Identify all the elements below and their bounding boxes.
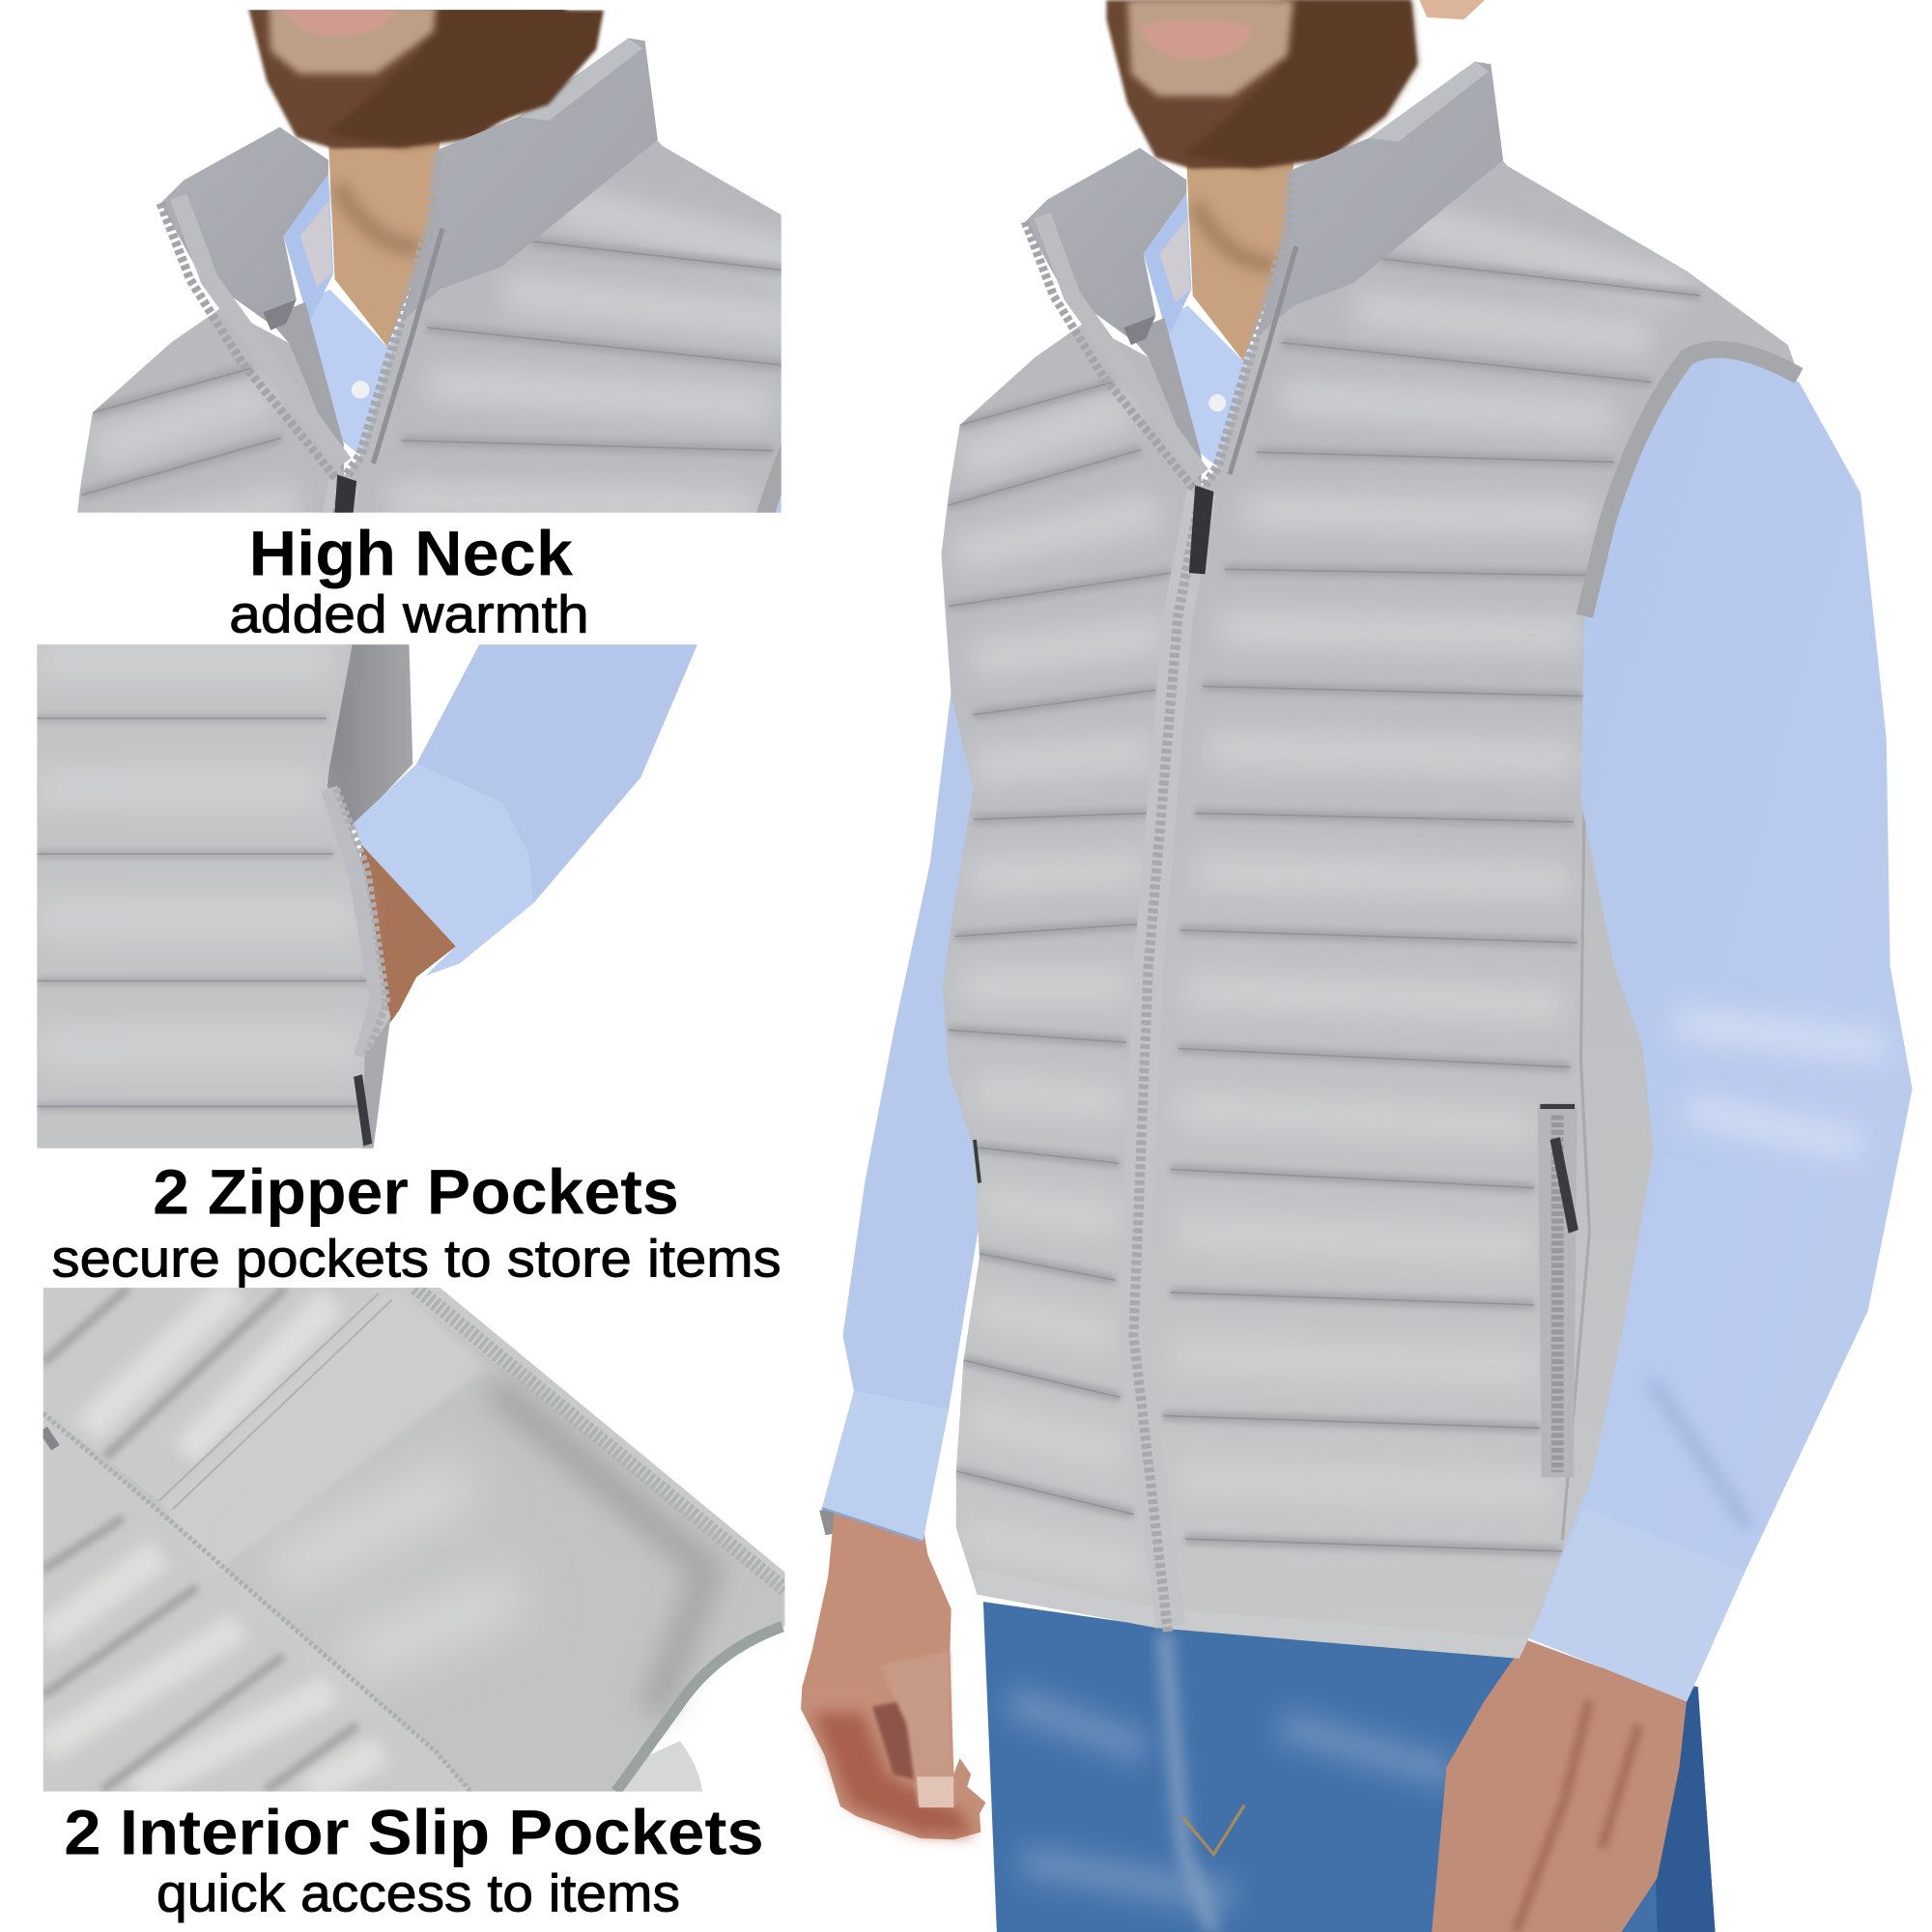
ear [1419,0,1485,19]
quilting seams, soft [949,259,1700,1551]
arm opening binding [616,1627,782,1792]
heading: 2 Zipper Pockets: 2 Zipper Pockets [153,1156,679,1228]
left wristwatch [819,1507,838,1535]
zipper edge [415,1288,784,1589]
heading: 2 Interior Slip Pockets: 2 Interior Slip Pockets [64,1798,764,1869]
puff highlights [955,222,1688,1571]
shirt sleeve [416,644,697,903]
main figure: man wearing grey puffer vest [801,0,1913,1932]
hem trim [974,1583,1528,1654]
right collar [1256,62,1503,337]
jeans [983,1602,1716,1932]
text: quick access to items: quick access to items [156,1862,680,1922]
vest body [941,135,1799,1659]
panel: interior slip pockets detail photo [43,1287,784,1792]
text: secure pockets to store items: secure pockets to store items [52,1228,781,1288]
shirt collar and chest [1144,193,1256,467]
right sleeve [1526,349,1913,1701]
hand in pocket [361,844,456,1057]
text: added warmth: added warmth [229,583,589,643]
extra beard at panel crop [493,10,604,124]
neck [1186,160,1293,361]
armhole trim [1584,350,1799,616]
heading: High Neck: High Neck [249,519,573,590]
side pocket zipper [1538,1106,1578,1477]
beard and mouth [1106,0,1417,169]
pocket zipper [329,788,387,1057]
inner left collar [1025,148,1202,487]
left pocket slit [975,1140,980,1182]
quilting seams, sharp [949,259,1700,1551]
shirt cuff [353,764,533,976]
left sleeve [822,690,998,1542]
right hand [1432,1640,1687,1932]
left hand [801,1513,985,1839]
centre zipper [1025,174,1296,1634]
vest side panel [327,644,412,828]
quilted lining base [43,1288,784,1792]
pocket lower edge and pull [354,1016,390,1149]
main zipper pull [1189,486,1213,574]
vest front [37,644,390,1149]
panel: zipper pockets detail photo [37,644,697,1149]
panel: high neck detail photo [77,10,781,513]
inner slip pocket panel [43,1288,782,1792]
